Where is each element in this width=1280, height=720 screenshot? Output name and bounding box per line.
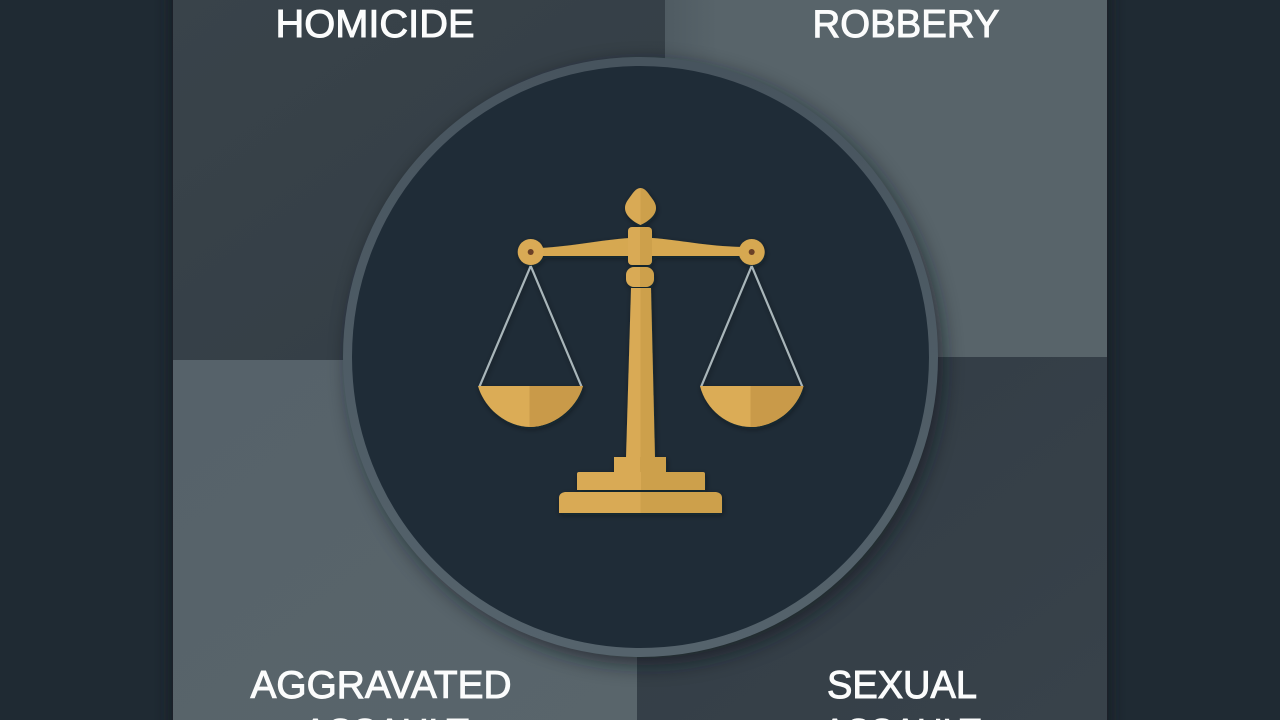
- base tier 2: [577, 472, 705, 490]
- right strings: [701, 266, 802, 387]
- finial: [625, 188, 656, 225]
- right pivot: [749, 249, 755, 255]
- label: robbery: ROBBERY: [812, 3, 1000, 46]
- circle shadow: [349, 63, 943, 665]
- quadrant: bottom right: [637, 357, 1107, 720]
- beam: [540, 238, 742, 256]
- quadrant: top left: [173, 0, 665, 360]
- left beam end: [518, 239, 544, 265]
- right beam end: [739, 239, 765, 265]
- quadrant: top right: [665, 0, 1107, 357]
- left strings: [479, 266, 582, 387]
- label: homicide: HOMICIDE: [276, 3, 474, 46]
- label: aggravated assault: AGGRAVATED: [250, 664, 512, 707]
- icon: scales of justice: [478, 188, 804, 513]
- right pan: [700, 386, 804, 427]
- post: [626, 288, 655, 458]
- base tier 3: [559, 492, 722, 513]
- left pivot: [528, 249, 534, 255]
- central circle: [348, 62, 934, 652]
- label: sexual assault: SEXUAL: [827, 664, 977, 707]
- left pan: [478, 386, 583, 427]
- panel shadow: [168, 0, 1112, 720]
- lower collar: [626, 267, 654, 287]
- quadrant: bottom left: [173, 360, 637, 720]
- base tier 1: [614, 457, 666, 472]
- upper collar: [628, 227, 652, 265]
